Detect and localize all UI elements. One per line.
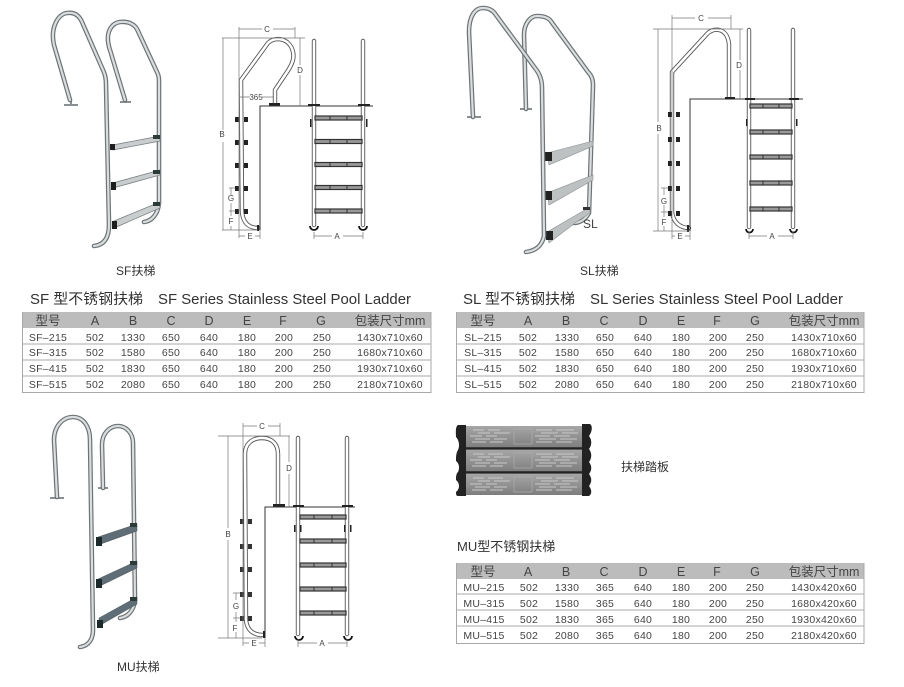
table rows: 250 bbox=[746, 614, 764, 626]
diagram: SF ladder side view: G bbox=[228, 194, 234, 203]
table header: A bbox=[91, 314, 100, 328]
table rows: 1330 bbox=[555, 582, 579, 594]
table rows: 1680x710x60 bbox=[357, 347, 423, 359]
table header: 包装尺寸mm bbox=[789, 314, 859, 328]
table rows: 640 bbox=[634, 332, 652, 344]
table header: B bbox=[562, 565, 570, 579]
table rows: 640 bbox=[200, 347, 218, 359]
table rows: MU–515 bbox=[463, 630, 505, 642]
table rows: 502 bbox=[520, 582, 538, 594]
table rows: 502 bbox=[520, 598, 538, 610]
table rows: SF–315 bbox=[29, 347, 67, 359]
table: SF series bbox=[22, 312, 431, 392]
table rows: 180 bbox=[238, 347, 256, 359]
heading: SF series: SF 型不锈钢扶梯 bbox=[30, 291, 143, 308]
table rows: 200 bbox=[275, 363, 293, 375]
table rows: 180 bbox=[238, 363, 256, 375]
diagram: SF ladder side view: C bbox=[264, 25, 270, 34]
diagram: SF ladder front view bbox=[308, 41, 370, 241]
table rows: SL–415 bbox=[464, 363, 502, 375]
diagram: MU ladder side view: C bbox=[259, 422, 265, 431]
table rows: 180 bbox=[672, 582, 690, 594]
table rows: 2180x710x60 bbox=[791, 379, 857, 391]
table rows: 365 bbox=[596, 598, 614, 610]
table rows: 2180x710x60 bbox=[357, 379, 423, 391]
diagram: MU ladder front view: A bbox=[319, 639, 325, 648]
diagram: MU ladder side view bbox=[218, 422, 355, 648]
diagram: SL ladder side view: C bbox=[698, 14, 704, 23]
table rows bbox=[463, 582, 857, 642]
table rows: 650 bbox=[596, 347, 614, 359]
table rows: 180 bbox=[238, 379, 256, 391]
table rows: 2180x420x60 bbox=[791, 630, 857, 642]
table rows: 1680x420x60 bbox=[791, 598, 857, 610]
table rows: 502 bbox=[519, 379, 537, 391]
heading: SL series: SL Series Stainless Steel Pool Ladder bbox=[590, 292, 843, 308]
table rows: 365 bbox=[596, 582, 614, 594]
table header: 包装尺寸mm bbox=[355, 314, 425, 328]
diagram: SL ladder front view bbox=[745, 30, 799, 241]
stray label: SL: SL bbox=[583, 217, 598, 231]
table header: C bbox=[166, 314, 176, 328]
diagram: SF ladder side view: D bbox=[297, 66, 303, 75]
table rows: 180 bbox=[238, 332, 256, 344]
diagram: SL ladder side view: F bbox=[662, 218, 667, 227]
table rows: 1330 bbox=[555, 332, 579, 344]
table rows: 502 bbox=[86, 363, 104, 375]
table rows: 250 bbox=[313, 379, 331, 391]
diagram: SL ladder side view bbox=[653, 14, 803, 241]
table rows: 200 bbox=[709, 332, 727, 344]
table header: A bbox=[524, 565, 533, 579]
caption: ladder treads: 扶梯踏板 bbox=[621, 459, 669, 474]
table header: G bbox=[750, 314, 760, 328]
table header: E bbox=[243, 314, 251, 328]
table header: B bbox=[562, 314, 570, 328]
table rows: 250 bbox=[746, 582, 764, 594]
table rows: 200 bbox=[709, 614, 727, 626]
table header: C bbox=[599, 565, 609, 579]
table header: F bbox=[713, 565, 721, 579]
table rows: SF–415 bbox=[29, 363, 67, 375]
table rows: 1580 bbox=[121, 347, 145, 359]
table header: 包装尺寸mm bbox=[789, 565, 859, 579]
table rows: 640 bbox=[200, 363, 218, 375]
photo: SL ladder bbox=[467, 8, 593, 252]
diagram: MU ladder side view: B bbox=[225, 530, 231, 539]
table rows: 502 bbox=[519, 363, 537, 375]
table rows: 640 bbox=[634, 347, 652, 359]
diagram: SL ladder side view: G bbox=[661, 197, 667, 206]
table: MU series bbox=[456, 563, 864, 644]
table header: F bbox=[279, 314, 287, 328]
heading: MU series: MU型不锈钢扶梯 bbox=[457, 539, 555, 554]
table rows: 502 bbox=[520, 614, 538, 626]
table rows bbox=[464, 332, 857, 391]
table header: E bbox=[677, 565, 685, 579]
table rows: MU–415 bbox=[463, 614, 505, 626]
table rows: 1330 bbox=[121, 332, 145, 344]
table header: A bbox=[524, 314, 533, 328]
table rows: 250 bbox=[313, 332, 331, 344]
table rows: 502 bbox=[519, 332, 537, 344]
table rows: 365 bbox=[596, 630, 614, 642]
table rows: 200 bbox=[709, 598, 727, 610]
table rows: 250 bbox=[746, 332, 764, 344]
table rows: 640 bbox=[200, 332, 218, 344]
table header: F bbox=[713, 314, 721, 328]
table rows: 250 bbox=[313, 347, 331, 359]
table rows: SL–215 bbox=[464, 332, 502, 344]
diagram: SL ladder side view: B bbox=[656, 124, 662, 133]
diagram: SF ladder side view: E bbox=[247, 232, 253, 241]
table rows: 1930x710x60 bbox=[357, 363, 423, 375]
table rows: 250 bbox=[746, 379, 764, 391]
diagram: SF ladder side view: F bbox=[229, 217, 234, 226]
table rows: 1680x710x60 bbox=[791, 347, 857, 359]
table rows: 640 bbox=[634, 614, 652, 626]
heading: SL series: SL 型不锈钢扶梯 bbox=[463, 291, 575, 308]
table rows: MU–215 bbox=[463, 582, 505, 594]
table rows: 640 bbox=[634, 379, 652, 391]
table rows: 650 bbox=[596, 379, 614, 391]
photo: MU ladder bbox=[50, 417, 137, 647]
table header: 型号 bbox=[470, 314, 496, 328]
table rows: 650 bbox=[162, 379, 180, 391]
table header: E bbox=[677, 314, 685, 328]
table rows: SL–315 bbox=[464, 347, 502, 359]
table rows: 250 bbox=[746, 347, 764, 359]
table header bbox=[470, 565, 859, 579]
table rows: 180 bbox=[672, 598, 690, 610]
table rows: 250 bbox=[746, 598, 764, 610]
table rows: 180 bbox=[672, 614, 690, 626]
table rows: MU–315 bbox=[463, 598, 505, 610]
table rows bbox=[29, 332, 423, 391]
diagram: SF ladder side view bbox=[219, 25, 373, 241]
diagram: MU ladder side view: F bbox=[233, 624, 238, 633]
table rows: 2080 bbox=[555, 379, 579, 391]
heading: SL series bbox=[463, 291, 843, 308]
table rows: 1930x710x60 bbox=[791, 363, 857, 375]
table rows: 502 bbox=[519, 347, 537, 359]
table header: D bbox=[638, 314, 648, 328]
table rows: 250 bbox=[746, 363, 764, 375]
table rows: 640 bbox=[634, 363, 652, 375]
table rows: 200 bbox=[709, 630, 727, 642]
table: SL series bbox=[456, 312, 864, 392]
table rows: 2080 bbox=[121, 379, 145, 391]
diagram: SF ladder front view: A bbox=[334, 232, 340, 241]
table rows: 1830 bbox=[555, 614, 579, 626]
table rows: 640 bbox=[200, 379, 218, 391]
table rows: 1580 bbox=[555, 598, 579, 610]
diagram: MU ladder side view: E bbox=[251, 639, 257, 648]
photo: SF ladder bbox=[53, 13, 160, 246]
table rows: 200 bbox=[709, 347, 727, 359]
table rows: 250 bbox=[313, 363, 331, 375]
table rows: 650 bbox=[162, 363, 180, 375]
table rows: 1580 bbox=[555, 347, 579, 359]
caption: SL ladder: SL扶梯 bbox=[580, 263, 619, 278]
table rows: 640 bbox=[634, 630, 652, 642]
table rows: 640 bbox=[634, 582, 652, 594]
table rows: 180 bbox=[672, 347, 690, 359]
table rows: 502 bbox=[520, 630, 538, 642]
table rows: 1430x710x60 bbox=[357, 332, 423, 344]
table header: D bbox=[638, 565, 648, 579]
diagram: MU ladder front view bbox=[293, 438, 353, 648]
table rows: 1430x710x60 bbox=[791, 332, 857, 344]
table rows: 650 bbox=[596, 332, 614, 344]
table rows: SF–515 bbox=[29, 379, 67, 391]
table rows: 1830 bbox=[555, 363, 579, 375]
diagram: MU ladder side view: D bbox=[286, 464, 292, 473]
table rows: 1830 bbox=[121, 363, 145, 375]
photo: ladder treads bbox=[456, 424, 592, 496]
table header: D bbox=[204, 314, 214, 328]
table header bbox=[470, 314, 859, 328]
caption: SF ladder: SF扶梯 bbox=[116, 263, 155, 278]
table header: 型号 bbox=[35, 314, 61, 328]
table rows: 640 bbox=[634, 598, 652, 610]
table header: 型号 bbox=[470, 565, 496, 579]
table rows: SF–215 bbox=[29, 332, 67, 344]
table rows: 200 bbox=[275, 379, 293, 391]
table header: G bbox=[316, 314, 326, 328]
table rows: 200 bbox=[709, 379, 727, 391]
table rows: 180 bbox=[672, 379, 690, 391]
table rows: 650 bbox=[596, 363, 614, 375]
table rows: 650 bbox=[162, 347, 180, 359]
table header bbox=[35, 314, 425, 328]
diagram: SL ladder side view: E bbox=[677, 232, 683, 241]
table rows: 200 bbox=[275, 332, 293, 344]
table rows: 1430x420x60 bbox=[791, 582, 857, 594]
diagram: SL ladder front view: A bbox=[769, 232, 775, 241]
table header: B bbox=[129, 314, 137, 328]
table rows: 365 bbox=[596, 614, 614, 626]
table rows: 200 bbox=[709, 582, 727, 594]
table rows: 250 bbox=[746, 630, 764, 642]
caption: MU ladder: MU扶梯 bbox=[117, 659, 160, 674]
diagram: SL ladder side view: D bbox=[736, 61, 742, 70]
table header: C bbox=[599, 314, 609, 328]
diagram: SF ladder side view: 365 bbox=[249, 93, 263, 102]
table rows: 502 bbox=[86, 332, 104, 344]
table rows: 200 bbox=[275, 347, 293, 359]
table rows: 2080 bbox=[555, 630, 579, 642]
table rows: 502 bbox=[86, 347, 104, 359]
table rows: 180 bbox=[672, 332, 690, 344]
table header: G bbox=[750, 565, 760, 579]
diagram: MU ladder side view: G bbox=[233, 602, 239, 611]
table rows: 180 bbox=[672, 630, 690, 642]
table rows: 502 bbox=[86, 379, 104, 391]
table rows: 200 bbox=[709, 363, 727, 375]
heading: SF series bbox=[30, 291, 411, 308]
diagram: SF ladder side view: B bbox=[219, 130, 225, 139]
heading: SF series: SF Series Stainless Steel Pool Ladder bbox=[158, 292, 411, 308]
table rows: 1930x420x60 bbox=[791, 614, 857, 626]
table rows: 650 bbox=[162, 332, 180, 344]
table rows: SL–515 bbox=[464, 379, 502, 391]
table rows: 180 bbox=[672, 363, 690, 375]
